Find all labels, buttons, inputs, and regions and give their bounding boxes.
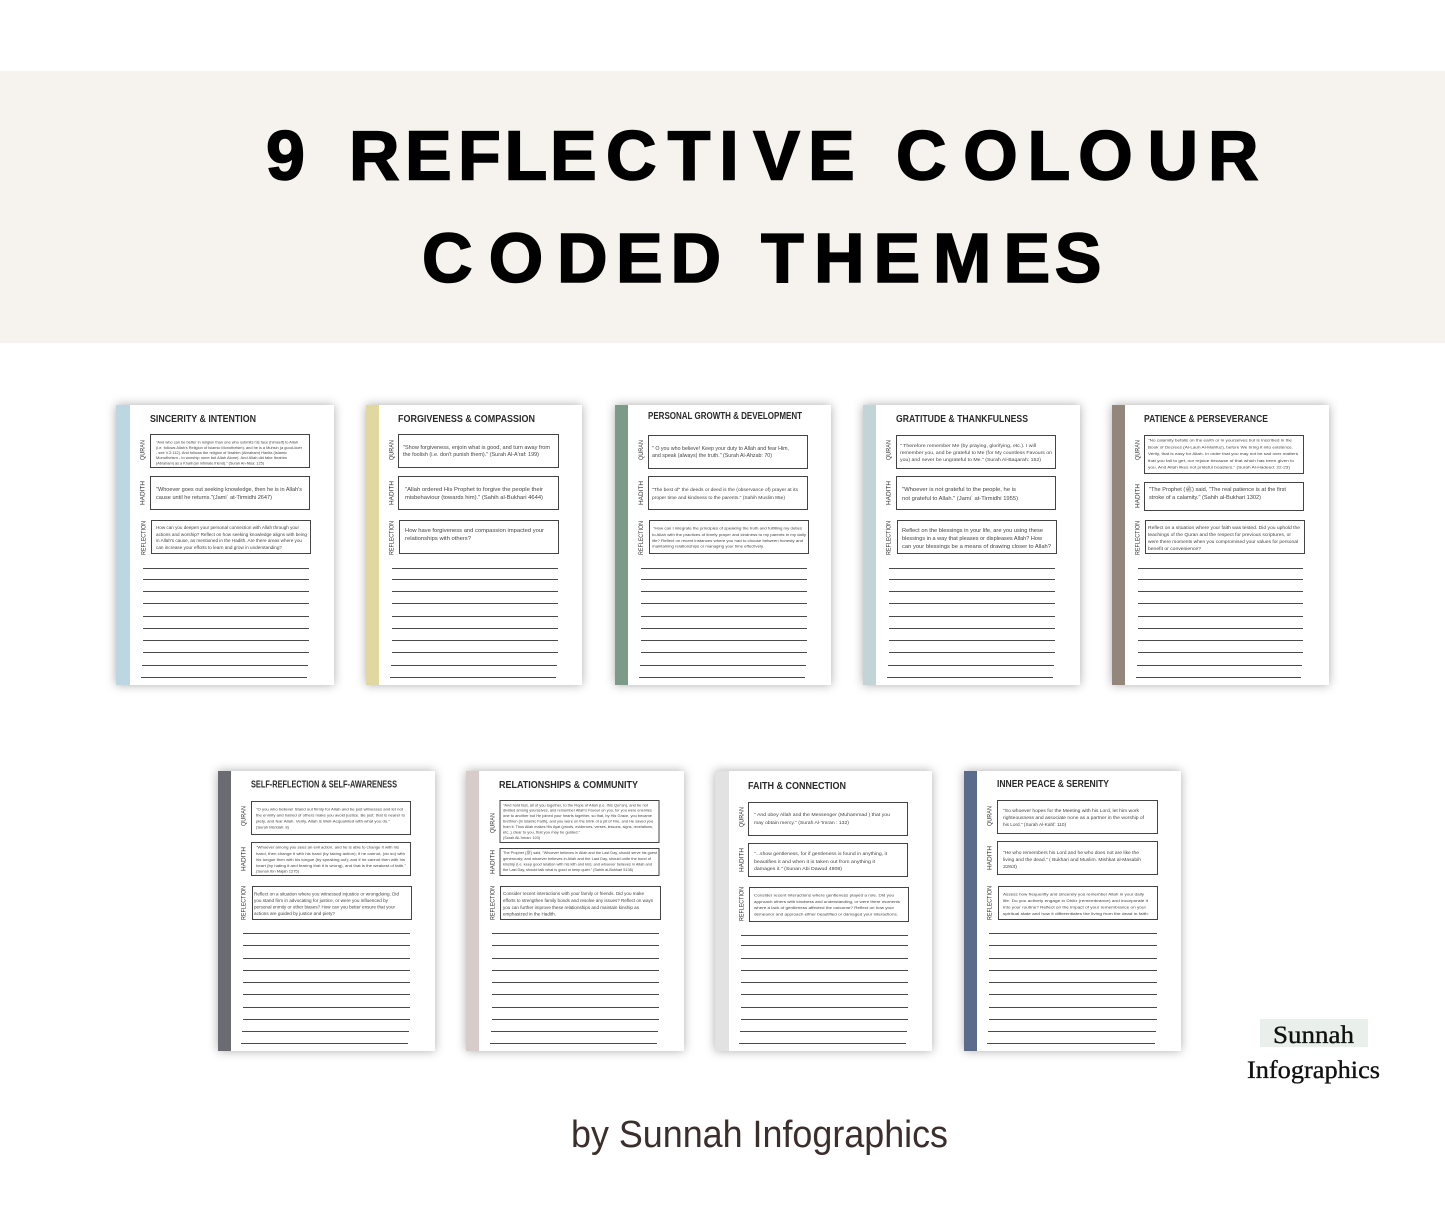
- quran box: " O you who believe! Keep your duty to Allah and fear Him,: [652, 446, 789, 452]
- side labels: [986, 806, 994, 920]
- logo: Sunnah Infographics: Infographics: [1247, 1057, 1380, 1084]
- quran box: (Abraham) as a Khalil (an intimate friend)." (Surah An-Nisa: 125): [156, 460, 265, 466]
- reflection box: in Allah's cause, as mentioned in the Hadith. Are there areas where you: [156, 538, 303, 543]
- quran box: [252, 802, 410, 834]
- hadith box: damages it." (Sunan Abi Dawud 4808): [754, 866, 843, 871]
- heading: PERSONAL GROWTH & DEVELOPMENT: [648, 411, 802, 422]
- side labels: REFLECTION: [140, 521, 148, 555]
- panel: personal growth and development: [615, 405, 831, 685]
- reflection box: Reflect on the blessings in your life, are you using these: [902, 528, 1043, 534]
- hadith box: "Whoever goes out seeking knowledge, then he is in Allah's: [156, 487, 302, 493]
- quran box: and speak (always) the truth." (Surah Al-Ahzab: 70): [652, 453, 772, 459]
- hadith box: "The best of" the deeds or deed is the (observance of) prayer at its: [652, 487, 799, 492]
- title: CODED THEMES: [422, 219, 1101, 297]
- hadith box: proper time and kindness to the parents." (Sahih Muslim 85e): [652, 495, 786, 500]
- panel: faith and connection: [715, 771, 932, 1051]
- heading: SINCERITY & INTENTION: [150, 414, 256, 425]
- hadith box: his tongue then with his tongue (by speaking out); and if he cannot then with his: [256, 857, 405, 862]
- quran box: divided among yourselves, and remember Allah's Favour on you, for you were enemies: [503, 808, 652, 812]
- side labels: REFLECTION: [388, 521, 396, 555]
- hadith box: [252, 842, 410, 876]
- side labels: [738, 807, 746, 921]
- reflection box: can your blessings be a means of drawing closer to Allah?: [902, 544, 1051, 550]
- side labels: HADITH: [886, 481, 892, 505]
- side labels: HADITH: [1134, 484, 1142, 508]
- side labels: REFLECTION: [638, 521, 645, 555]
- reflection box: to Allah with the practices of timely prayer and kindness to my parents in my daily: [652, 532, 806, 537]
- quran box: from it. Thus Allah makes His Ayat (proofs, evidences, verses, lessons, signs, revelations,: [503, 824, 653, 829]
- reflection box: into your routine? Reflect on the impact of your remembrance on your: [1003, 904, 1147, 910]
- reflection box: Reflect on a situation where you witnessed injustice or wrongdoing. Did: [254, 892, 400, 896]
- quran box: [398, 434, 558, 468]
- hadith box: [748, 844, 908, 876]
- quran box: Book of Decrees (Al-Lauh Al-Mahfuz), before We bring it into existence.: [1148, 444, 1293, 450]
- hadith box: misbehaviour (towards him)." (Sahih al-Bukhari 4644): [405, 495, 543, 501]
- quran box: (Surah Ali-'Imran: 103): [503, 835, 541, 840]
- reflection box: life? Reflect on recent instances where you had to choose between honesty and: [652, 538, 803, 543]
- reflection box: [252, 886, 412, 920]
- quran box: [150, 434, 310, 468]
- quran box: Monotheism - to worship none but Allah Alone). And Allah did take Ibrahim: [156, 455, 287, 460]
- side labels: [388, 440, 396, 555]
- heading: GRATITUDE & THANKFULNESS: [896, 414, 1028, 425]
- reflection box: [152, 520, 310, 554]
- side labels: QURAN: [1134, 440, 1142, 460]
- side labels: HADITH: [738, 848, 746, 872]
- header band: [0, 71, 1445, 343]
- hadith box: [398, 476, 558, 510]
- side labels: HADITH: [240, 847, 248, 871]
- reflection box: Consider recent interactions where gentleness played a role. Did you: [754, 892, 894, 898]
- reflection box: Consider recent interactions with your family or friends. Did you make: [503, 891, 645, 896]
- reflection box: can increase your efforts to learn and grow in understanding?: [156, 545, 283, 550]
- hadith box: "...show gentleness, for if gentleness is found in anything, it: [754, 851, 888, 856]
- quran box: " Therefore remember Me (by praying, glorifying, etc.). I will: [900, 443, 1036, 448]
- side labels: QURAN: [490, 813, 496, 833]
- writing lines: [390, 568, 558, 678]
- side labels: HADITH: [638, 481, 645, 505]
- side labels: QURAN: [886, 440, 892, 460]
- hadith box: [896, 476, 1056, 510]
- hadith box: "Allah ordered His Prophet to forgive the people their: [405, 487, 543, 493]
- side labels: REFLECTION: [490, 886, 496, 920]
- hadith box: the Last Day, should talk what is good or keep quiet." (Sahih al-Bukhari 5138): [503, 867, 634, 872]
- quran box: [748, 802, 908, 836]
- quran box: his Lord." (Surah Al-Kahf: 110): [1003, 822, 1067, 827]
- side labels: HADITH: [388, 481, 396, 505]
- reflection box: [400, 520, 558, 554]
- side labels: [886, 440, 892, 555]
- reflection box: demeanor and approach either beautified or damaged your interactions.: [754, 912, 898, 916]
- writing lines: [987, 934, 1157, 1044]
- reflection box: actions are guided by justice and piety?: [254, 911, 335, 916]
- reflection box: How have forgiveness and compassion impacted your: [405, 528, 544, 534]
- hadith box: stroke of a calamity." (Sahih al-Bukhari 1302): [1149, 495, 1261, 501]
- hadith box: heart (by hating it and fearing that it is wrong), and that is the weakest of faith.": [256, 863, 407, 868]
- writing lines: [490, 934, 659, 1044]
- reflection box: [500, 886, 660, 920]
- side labels: REFLECTION: [886, 521, 892, 555]
- side labels: QURAN: [388, 440, 396, 460]
- side labels: QURAN: [738, 807, 746, 827]
- side labels: REFLECTION: [1134, 521, 1142, 555]
- reflection box: you stand firm in advocating for justice, or were you influenced by: [254, 898, 389, 903]
- quran box: the enmity and hatred of others make you avoid justice. Be just: that is nearer to: [256, 812, 405, 818]
- panel: gratitude and thankfulness: [863, 405, 1080, 685]
- heading: INNER PEACE & SERENITY: [997, 779, 1109, 790]
- quran box: brethren (in Islamic Faith), and you were on the brink of a pit of Fire, and He saved you: [503, 818, 653, 824]
- quran box: "And hold fast, all of you together, to the Rope of Allah (i.e. this Qur'an), and be not: [503, 802, 649, 808]
- writing lines: [639, 568, 807, 678]
- side labels: QURAN: [986, 806, 994, 826]
- reflection box: [998, 886, 1158, 920]
- side labels: QURAN: [638, 440, 645, 460]
- side labels: [140, 440, 148, 555]
- reflection box: approach others with kindness and understanding, or were there moments: [754, 899, 900, 904]
- quran box: [648, 436, 808, 468]
- quran box: (i.e. follows Allah's Religion of Islamic Monotheism); and he is a Muhsin (a good-doer: [156, 445, 303, 450]
- hadith box: [648, 476, 808, 510]
- quran box: remember you, and be grateful to Me (for My countless Favours on: [900, 450, 1053, 455]
- title: [266, 116, 1259, 297]
- hadith box: generously; and whoever believes in Allah and the Last Day, should unite the bond of: [503, 856, 652, 861]
- heading: PATIENCE & PERSEVERANCE: [1144, 414, 1268, 425]
- quran box: righteousness and associate none as a partner in the worship of: [1003, 815, 1145, 820]
- quran box: "So whoever hopes for the Meeting with his Lord, let him work: [1003, 808, 1140, 813]
- reflection box: efforts to strengthen family bonds and resolve any issues? Reflect on ways: [503, 898, 654, 903]
- side labels: REFLECTION: [240, 886, 248, 920]
- writing lines: [1136, 568, 1303, 678]
- reflection box: Assess how frequently and sincerely you remember Allah in your daily: [1003, 892, 1144, 896]
- hadith box: [998, 842, 1158, 874]
- side labels: HADITH: [490, 850, 496, 874]
- quran box: that you fail to get, nor rejoice because of that which has been given to: [1148, 458, 1294, 463]
- reflection box: [898, 520, 1056, 554]
- quran box: you) and never be ungrateful to Me." (Surah Al-Baqarah: 152): [900, 457, 1042, 462]
- quran box: piety, and fear Allah. Verily, Allah is Well-Acquainted with what you do.": [256, 818, 391, 824]
- quran box: "Show forgiveness, enjoin what is good, and turn away from: [403, 445, 551, 451]
- side labels: REFLECTION: [738, 887, 746, 921]
- reflection box: were there moments when you compromised your values for personal: [1148, 539, 1298, 544]
- quran box: [1144, 436, 1304, 474]
- reflection box: "How can I integrate the principles of speaking the truth and fulfilling my duties: [653, 526, 802, 530]
- side labels: [240, 806, 248, 920]
- panel: sincerity and intention: [116, 405, 334, 685]
- hadith box: "The Prophet (ﷺ) said, "The real patience is at the first: [1149, 485, 1287, 493]
- quran box: [500, 800, 659, 842]
- reflection box: [750, 888, 908, 922]
- panel: forgiveness and compassion: [366, 405, 582, 685]
- hadith box: "Whoever is not grateful to the people, he is: [902, 487, 1016, 493]
- writing lines: [141, 568, 309, 678]
- hadith box: "He who remembers his Lord and he who does not are like the: [1003, 850, 1140, 855]
- side labels: QURAN: [240, 806, 248, 826]
- side labels: HADITH: [986, 846, 994, 870]
- writing lines: [241, 934, 410, 1044]
- quran box: [896, 436, 1056, 468]
- hadith box: kinship (i.e. keep good relation with his kith and kin); and whoever believes in Allah and: [503, 862, 652, 866]
- reflection box: maintaining relationships or managing your time effectively.: [652, 544, 764, 548]
- reflection box: teachings of the Quran and the respect for previous scriptures, or: [1148, 532, 1292, 537]
- heading: FORGIVENESS & COMPASSION: [398, 414, 535, 425]
- panel: patience and perseverance: [1112, 405, 1329, 685]
- reflection box: blessings in a way that pleases or displeases Allah? How: [902, 536, 1042, 542]
- quran box: you. And Allah likes not prideful boasters." (Surah Al-Hadeed: 22-23): [1148, 464, 1291, 470]
- title: 9 REFLECTIVE COLOUR: [266, 116, 1259, 194]
- quran box: [998, 800, 1158, 834]
- hadith box: "Whoever among you sees an evil action, and he is able to change it with his: [256, 844, 399, 850]
- reflection box: [650, 520, 808, 554]
- reflection box: benefit or convenience?: [1148, 546, 1202, 551]
- hadith box: living and the dead." ( Bukhari and Muslim. Mishkat al-Masabih: [1003, 857, 1142, 862]
- hadith box: cause until he returns."(Jami` at-Tirmidhi 2647): [156, 495, 272, 501]
- writing lines: [887, 568, 1055, 678]
- panel: relationships and community: [466, 771, 684, 1051]
- quran box: "No calamity befalls on the earth or in yourselves but is inscribed in the: [1148, 438, 1292, 442]
- hadith box: The Prophet (ﷺ) said, "Whoever believes in Allah and the Last Day, should serve his guest: [503, 849, 658, 855]
- hadith box: [150, 476, 310, 510]
- reflection box: How can you deepen your personal connection with Allah through your: [156, 525, 300, 530]
- hadith box: [500, 848, 659, 876]
- reflection box: you can further improve these relationships and maintain kinship as: [503, 905, 640, 910]
- reflection box: personal enmity or other biases? How can you better ensure that your: [254, 904, 396, 910]
- reflection box: where a lack of gentleness affected the outcome? Reflect on how your: [754, 905, 895, 910]
- quran box: " And obey Allah and the Messenger (Muhammad ) that you: [754, 812, 891, 817]
- panel: inner peace and serenity: [964, 771, 1181, 1051]
- reflection box: life. Do you actively engage in Dhikr (remembrance) and incorporate it: [1003, 898, 1149, 903]
- hadith box: 2263): [1003, 864, 1018, 869]
- quran box: one to another but He joined your hearts together, so that, by His Grace, you became: [503, 813, 652, 818]
- reflection box: Reflect on a situation where your faith was tested. Did you uphold the: [1148, 525, 1301, 530]
- side labels: [1134, 440, 1142, 555]
- heading: RELATIONSHIPS & COMMUNITY: [499, 780, 638, 791]
- quran box: "And who can be better in religion than one who submits his face (himself) to Allah: [156, 440, 298, 444]
- hadith box: not grateful to Allah." (Jami` at-Tirmidhi 1955): [902, 496, 1018, 502]
- logo: Sunnah Infographics: [1247, 1019, 1380, 1084]
- side labels: [638, 440, 645, 555]
- logo: Sunnah Infographics: Sunnah: [1273, 1022, 1355, 1049]
- quran box: may obtain mercy." (Surah Al-'Imran : 132): [754, 820, 850, 825]
- side labels: QURAN: [140, 440, 146, 460]
- quran box: - see V.2:112). And follows the religion of Ibrahim (Abraham) Hanifa (Islamic: [156, 450, 287, 455]
- byline: by Sunnah Infographics: [571, 1114, 948, 1156]
- hadith box: beautifies it and when it is taken out from anything it: [754, 859, 876, 864]
- reflection box: actions and worship? Reflect on how seeking knowledge aligns with being: [156, 532, 308, 537]
- heading: SELF-REFLECTION & SELF-AWARENESS: [251, 780, 397, 790]
- quran box: (Surah Ma'idah: 8): [256, 824, 290, 830]
- hadith box: hand, then change it with his hand (by taking action); if he cannot, (do so) with: [256, 851, 405, 856]
- heading: FAITH & CONNECTION: [748, 781, 846, 792]
- quran box: "O you who believe! Stand out firmly for Allah and be just witnesses and let not: [256, 806, 404, 812]
- side labels: REFLECTION: [986, 886, 994, 920]
- reflection box: relationships with others?: [405, 536, 471, 542]
- reflection box: [1146, 520, 1304, 554]
- hadith box: [1144, 482, 1304, 510]
- panel: self-reflection and self-awareness: [218, 771, 435, 1051]
- quran box: Verily, that is easy for Allah. In order that you may not be sad over matters: [1148, 451, 1298, 456]
- quran box: etc.,) clear to you, that you may be guided.": [503, 830, 581, 834]
- reflection box: spiritual state and how it differentiates the living from the dead in faith.: [1003, 911, 1149, 916]
- side labels: HADITH: [140, 481, 146, 505]
- quran box: the foolish (i.e. don't punish them)." (Surah Al-A'raf: 199): [403, 452, 539, 458]
- hadith box: (Sunan Ibn Majah 1275): [256, 868, 300, 874]
- side labels: [490, 813, 496, 920]
- reflection box: emphasized in the Hadith.: [503, 912, 556, 916]
- writing lines: [739, 936, 908, 1044]
